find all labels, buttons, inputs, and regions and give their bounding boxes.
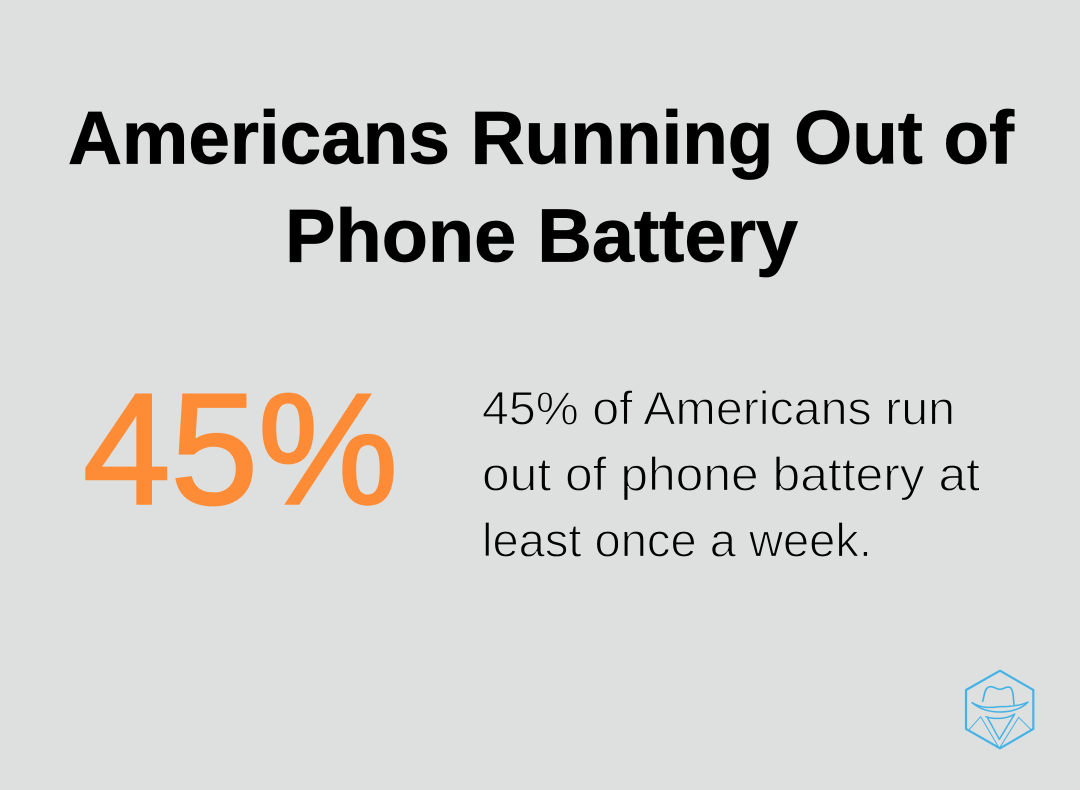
logo hat crown xyxy=(983,687,1014,705)
logo shoulders xyxy=(969,717,1031,748)
logo coat lapels xyxy=(986,714,1015,739)
statistic description: least once a week. xyxy=(482,514,872,568)
logo hat brim xyxy=(972,702,1028,712)
statistic description: 45% of Americans run xyxy=(482,382,955,436)
logo hexagon outline xyxy=(966,671,1033,748)
icon: hexagon logo with spy hat xyxy=(966,671,1033,748)
title: Phone Battery xyxy=(285,194,798,278)
title xyxy=(68,96,1015,278)
statistic description: out of phone battery at xyxy=(482,448,980,502)
statistic description xyxy=(482,382,980,568)
title: Americans Running Out of xyxy=(68,96,1015,180)
big statistic: 45%: 45% xyxy=(83,362,398,538)
